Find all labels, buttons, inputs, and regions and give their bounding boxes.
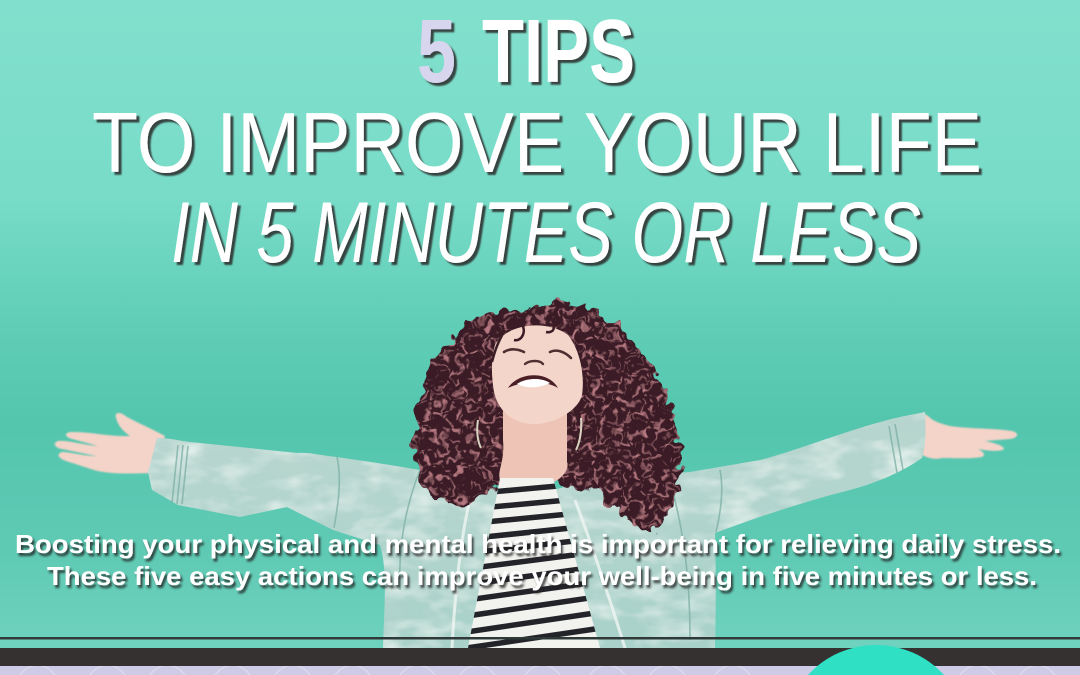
photo: woman with arms outstretched	[55, 300, 1017, 650]
title line 1: 5 TIPS	[417, 2, 635, 102]
intro text: These five easy actions can improve your well-being in five minutes or less.	[47, 561, 1037, 591]
jacket	[148, 412, 926, 648]
lavender lower panel	[0, 665, 1080, 675]
teal circle badge	[808, 645, 944, 675]
fringe curls	[492, 322, 554, 362]
striped shirt	[468, 478, 600, 648]
eyes and nose	[504, 349, 571, 364]
left hand	[55, 413, 165, 474]
dark band	[0, 648, 1080, 666]
title	[92, 2, 982, 281]
right hand	[915, 414, 1017, 459]
title line 1: 5 TIPS: 5	[417, 2, 456, 102]
title line 1: 5 TIPS: TIPS	[482, 2, 635, 102]
face	[492, 325, 583, 424]
intro text	[15, 529, 1061, 591]
smile	[508, 375, 558, 388]
jacket detail shading	[172, 424, 903, 648]
neck	[499, 405, 568, 485]
title line 2: TO IMPROVE YOUR LIFE	[92, 96, 982, 191]
hoop earrings	[477, 418, 581, 450]
hair back	[413, 300, 680, 532]
intro text: Boosting your physical and mental health is important for relieving daily stress.	[15, 529, 1061, 559]
